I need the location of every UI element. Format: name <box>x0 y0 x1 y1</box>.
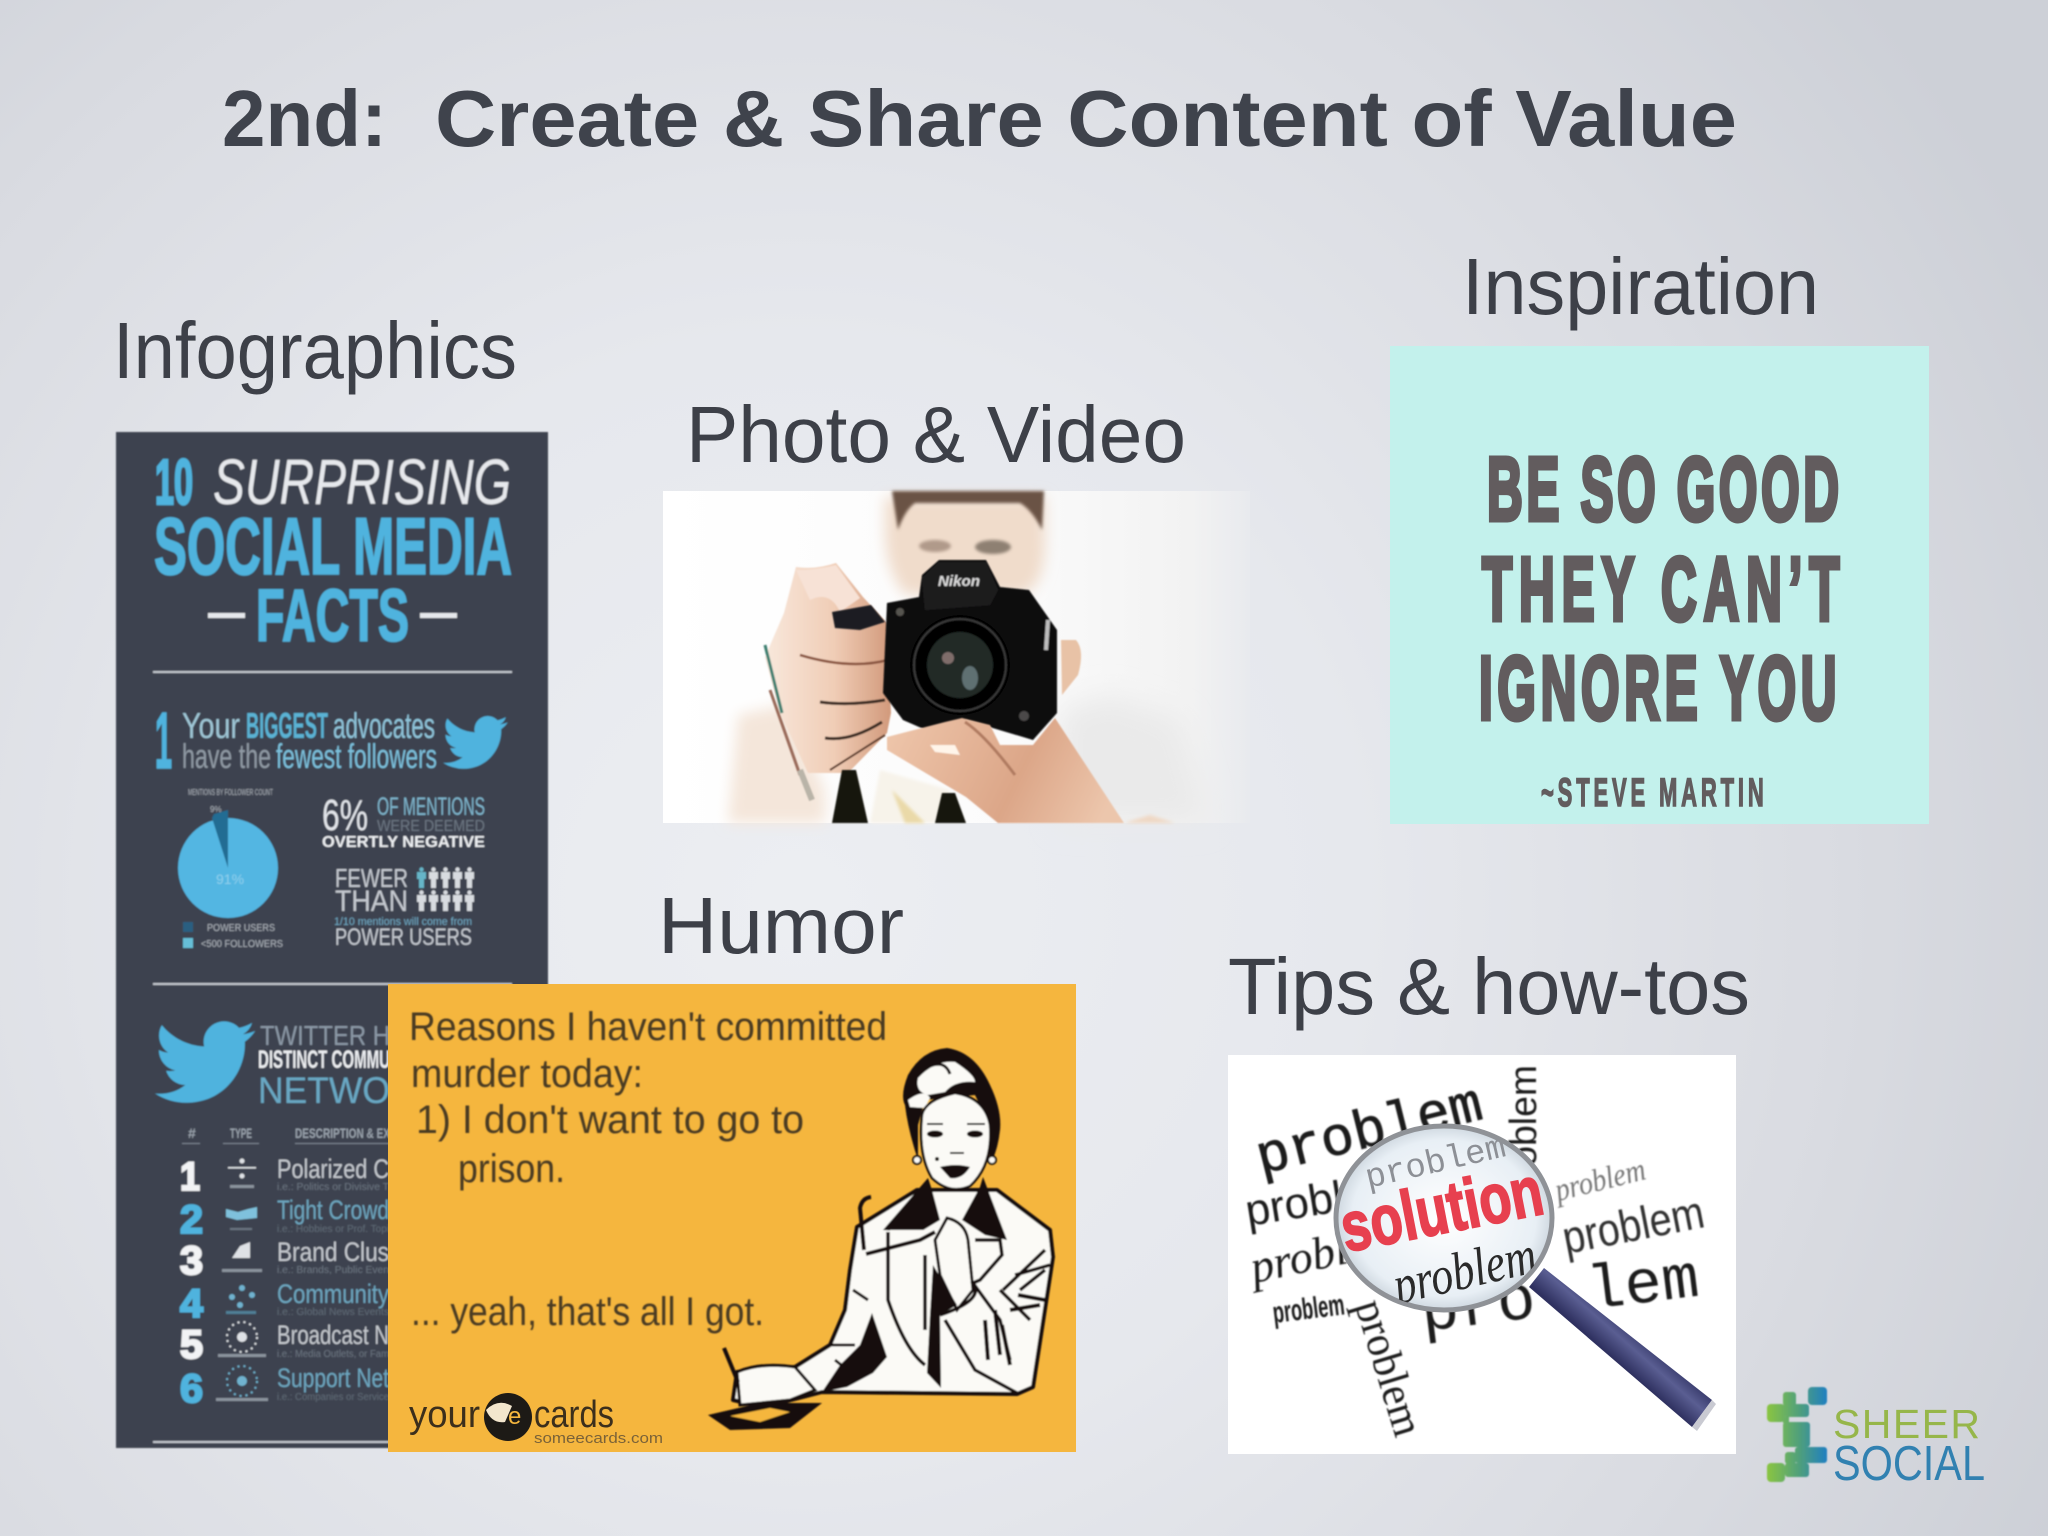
pie chart: 91% <box>216 871 244 887</box>
magnifying glass: problem <box>1362 1129 1513 1199</box>
fact 1 heading: have the <box>182 738 271 776</box>
infographic title: SURPRISING <box>213 446 511 518</box>
blouse and fist <box>935 1218 973 1310</box>
twitter networks heading: TWITTER H <box>260 1020 390 1051</box>
quote text: IGNORE YOU <box>1479 638 1837 739</box>
ecard text: murder today: <box>411 1052 643 1096</box>
stat: fewer than: 1/10 mentions will come from <box>334 916 472 928</box>
infographic title: SOCIAL MEDIA <box>154 502 512 592</box>
ecard text: ... yeah, that's all I got. <box>411 1290 764 1334</box>
heading: Infographics: Infographics <box>113 306 517 395</box>
table rows: 4 <box>180 1282 204 1326</box>
table rows: i.e.: Politics or Divisive T <box>277 1182 389 1193</box>
problem words: problem <box>1250 1073 1489 1190</box>
logo mark <box>1767 1387 1827 1482</box>
heading: Photo & Video: Photo & Video <box>686 390 1186 479</box>
ecard text <box>409 1005 887 1334</box>
magnifying glass: problem <box>1384 1225 1542 1316</box>
woman illustration <box>708 1048 1053 1430</box>
table rows: Brand Clus <box>277 1237 389 1267</box>
panel: photo of camera <box>663 491 1250 823</box>
icon: people rows <box>417 867 474 911</box>
problem words: problem <box>1271 1288 1346 1330</box>
icon: twitter bird small <box>443 716 508 769</box>
table rows: Support Net <box>277 1363 389 1393</box>
twitter networks heading <box>258 1020 390 1111</box>
table rows: 2 <box>180 1198 203 1242</box>
magnifying glass: solution <box>1334 1151 1549 1267</box>
logo: Sheer Social <box>1767 1387 1985 1491</box>
problem words: problem <box>1243 1211 1404 1293</box>
table rows: i.e.: Brands, Public Even <box>277 1265 389 1276</box>
quote text: THEY CAN’T <box>1482 539 1840 640</box>
panel: inspiration quote <box>1390 346 1929 824</box>
stat: fewer than: POWER USERS <box>335 924 472 951</box>
logo: Sheer Social: SOCIAL <box>1833 1437 1985 1491</box>
infographic title: 10 <box>155 446 193 518</box>
pie chart <box>178 788 283 950</box>
table rows: 3 <box>180 1239 203 1283</box>
title: Create & Share Content of Value <box>435 74 1737 163</box>
quote text <box>1479 439 1840 815</box>
face <box>921 1093 990 1189</box>
table rows: i.e.: Global News Events <box>277 1307 389 1318</box>
someecards logo: your <box>409 1394 480 1436</box>
heading: Inspiration: Inspiration <box>1462 242 1819 331</box>
infographic title <box>154 446 512 657</box>
heading: Tips & how-tos: Tips & how-tos <box>1228 942 1750 1031</box>
icon: twitter bird large <box>155 1021 255 1103</box>
panel: infographic <box>116 432 548 1448</box>
table rows: i.e.: Media Outlets, or Fam <box>277 1349 389 1360</box>
title: 2nd: <box>222 74 387 163</box>
table rows: i.e.: Companies or Service <box>277 1392 389 1403</box>
pie chart: POWER USERS <box>207 923 275 934</box>
stat: 6% of mentions: OVERTLY NEGATIVE <box>322 834 485 851</box>
ecard text: 1) I don't want to go to <box>416 1098 804 1142</box>
camera strap <box>832 770 966 823</box>
glasses <box>860 1197 935 1254</box>
left arm shadow <box>822 1313 887 1392</box>
hand, pen and notebook <box>708 1348 822 1430</box>
hand left <box>765 563 891 800</box>
problem words: problem <box>1345 1294 1433 1442</box>
stat: 6% of mentions <box>322 791 485 851</box>
someecards logo <box>409 1393 663 1447</box>
table rows: 1 <box>180 1155 200 1199</box>
jacket lines <box>888 1232 1050 1393</box>
stat: 6% of mentions: 6% <box>322 791 368 840</box>
ecard text: Reasons I haven't committed <box>409 1005 887 1049</box>
stat: fewer than: THAN <box>335 885 408 918</box>
stat: fewer than: FEWER <box>335 863 408 893</box>
fact 1 heading: Your <box>182 705 240 746</box>
problem words: lem <box>1584 1244 1703 1328</box>
magnifying glass <box>1334 1126 1716 1431</box>
collar <box>883 1177 1007 1240</box>
camera: Nikon <box>938 573 980 590</box>
someecards logo: e <box>508 1403 521 1430</box>
table header: TYPE <box>230 1125 252 1141</box>
tie <box>927 1265 957 1388</box>
stat: 6% of mentions: OF MENTIONS <box>377 793 485 821</box>
fact 1 heading: 1 <box>155 696 172 785</box>
pie chart: <500 FOLLOWERS <box>201 939 283 950</box>
problem words: problem <box>1558 1185 1708 1264</box>
stat: 6% of mentions: WERE DEEMED <box>377 818 485 835</box>
fact 1 heading: fewest followers <box>276 738 437 776</box>
problem words: problem <box>1503 1065 1545 1200</box>
blurred person <box>885 491 1205 823</box>
table rows: i.e.: Hobbies or Prof. Topi <box>277 1224 389 1235</box>
heading: Humor: Humor <box>658 881 904 970</box>
twitter networks heading: DISTINCT COMMU <box>258 1046 390 1074</box>
table header <box>182 1125 390 1144</box>
hair <box>903 1048 1000 1165</box>
table header: # <box>188 1125 196 1141</box>
pie chart: MENTIONS BY FOLLOWER COUNT <box>188 788 273 797</box>
fact 1 heading <box>155 696 437 785</box>
table rows: Broadcast N <box>277 1320 389 1350</box>
problem words <box>1242 1065 1708 1442</box>
stat: fewer than <box>334 863 472 951</box>
table header: DESCRIPTION & EX <box>295 1125 390 1141</box>
table rows: Polarized C <box>277 1154 389 1184</box>
panel: tips solution image <box>1228 1055 1736 1454</box>
pie chart: 9% <box>210 805 222 814</box>
problem words: problem <box>1549 1151 1649 1208</box>
logo wordmark: SHEER <box>1833 1401 1980 1447</box>
table rows: 5 <box>180 1323 203 1367</box>
ecard text: prison. <box>458 1147 565 1191</box>
infographic title: FACTS <box>256 574 409 657</box>
someecards logo: cards <box>534 1394 614 1436</box>
problem words: pro <box>1417 1265 1540 1351</box>
quote text: BE SO GOOD <box>1487 439 1839 540</box>
hand right <box>887 640 1175 823</box>
camera <box>832 560 1057 740</box>
table rows: Community <box>277 1279 389 1309</box>
table rows: 6 <box>180 1367 203 1411</box>
someecards logo: someecards.com <box>534 1430 663 1447</box>
fact 1 heading: BIGGEST <box>246 705 328 746</box>
table rows: Tight Crowd <box>277 1195 389 1225</box>
table rows <box>180 1154 389 1411</box>
jacket <box>733 1190 1053 1407</box>
fact 1 heading: advocates <box>333 705 435 746</box>
panel: humor ecard <box>388 984 1076 1452</box>
problem words: problem <box>1242 1163 1407 1236</box>
twitter networks heading: NETWO <box>258 1070 390 1111</box>
quote text: ~STEVE MARTIN <box>1541 770 1764 815</box>
